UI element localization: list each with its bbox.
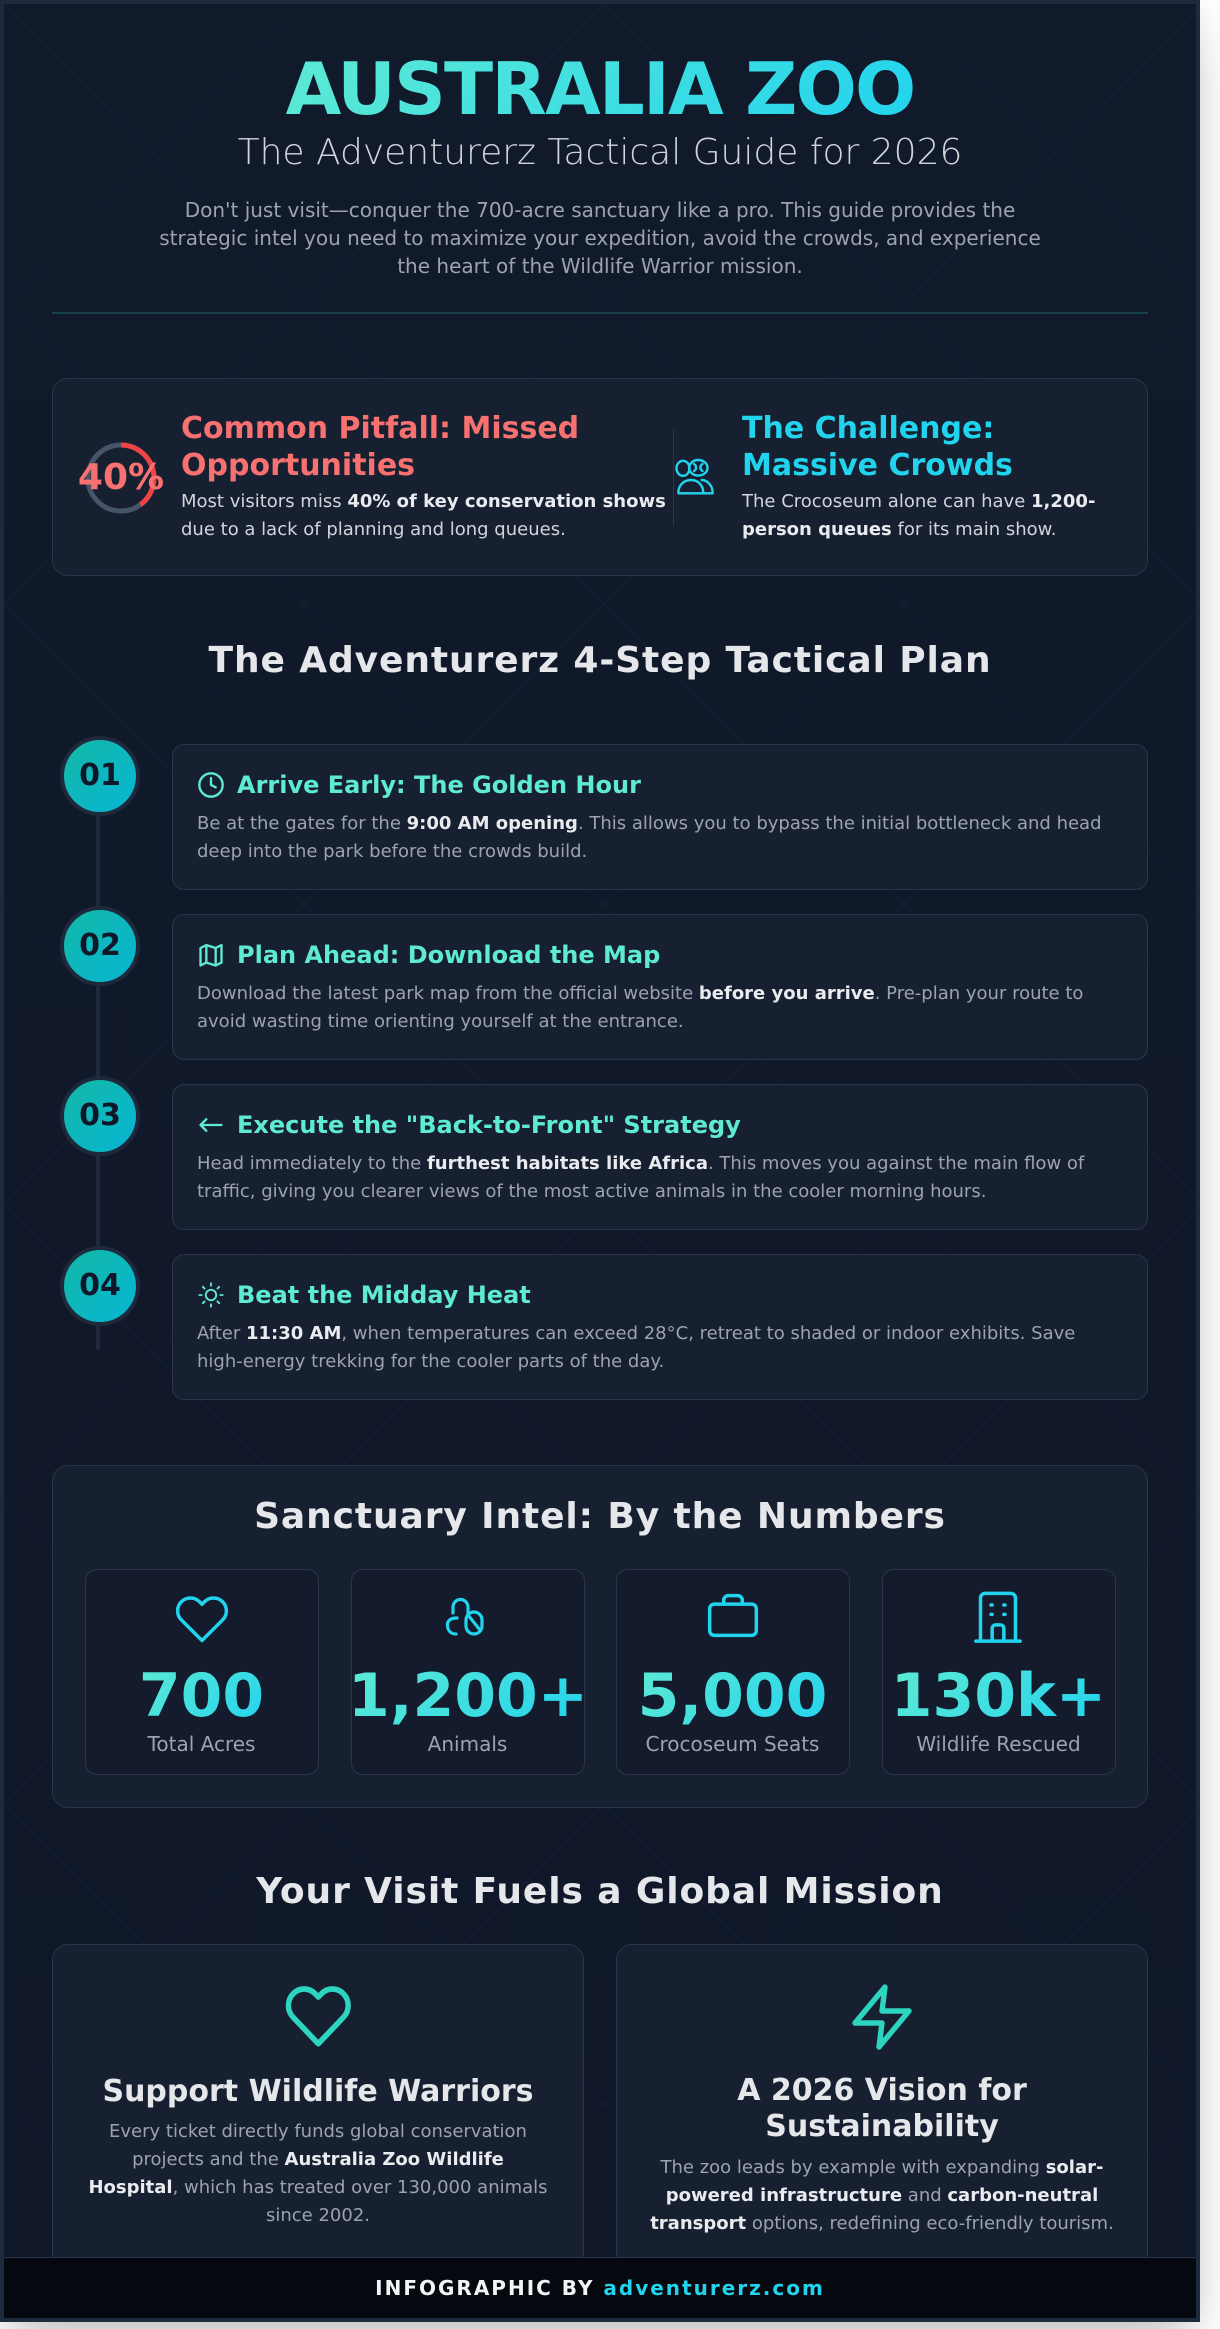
challenge heading: Massive Crowds [742, 448, 1013, 483]
step 2 text: Download the latest park map from the official website before you arrive. Pre-plan your route to [197, 983, 1083, 1004]
step 1 title: Arrive Early: The Golden Hour [237, 771, 641, 799]
icon: briefcase [708, 1594, 758, 1638]
challenge text: The Crocoseum alone can have 1,200- [742, 491, 1095, 512]
icon: 40 percent ring [78, 442, 164, 514]
step 4 title: Beat the Midday Heat [237, 1281, 531, 1309]
icon: animals [446, 1598, 484, 1636]
step 3 text [197, 1153, 1085, 1202]
mission text: warriors: Every ticket directly funds global conservation [109, 2121, 527, 2142]
icon: heart [176, 1596, 228, 1642]
step 3 title: Execute the "Back-to-Front" Strategy [237, 1111, 741, 1139]
pitfall heading: Common Pitfall: Missed [181, 411, 579, 446]
step 3 number [60, 1076, 140, 1156]
step 4 text: high-energy trekking for the cooler parts of the day. [197, 1351, 664, 1372]
mission text: warriors [88, 2121, 548, 2226]
step 1 text: deep into the park before the crowds build. [197, 841, 587, 862]
title: AUSTRALIA ZOO [286, 47, 914, 131]
step 3 card [172, 1084, 1148, 1230]
step 4 number [60, 1246, 140, 1326]
step 1 card [172, 744, 1148, 890]
mission text: sustainability: powered infrastructure and carbon-neutral [666, 2185, 1098, 2206]
heading: 4-step plan: The Adventurerz 4-Step Tactical Plan [208, 640, 992, 681]
panel: sanctuary numbers [52, 1465, 1148, 1808]
step 1 number: 01 [79, 758, 121, 793]
mission text: warriors: Hospital, which has treated over 130,000 animals [88, 2177, 548, 2198]
step 2 number: 02 [79, 928, 121, 963]
stat card: acres [85, 1569, 319, 1775]
pitfall text [181, 491, 666, 540]
mission title: sustainability: Sustainability [765, 2109, 999, 2144]
icon: clock [198, 772, 224, 798]
step 3 number: 03 [79, 1098, 121, 1133]
icon: lightning [852, 1984, 912, 2050]
challenge heading: The Challenge: [742, 411, 994, 446]
stat value: 5,000: 5,000 [638, 1661, 827, 1731]
panel divider [673, 429, 674, 526]
stat label: rescued: Wildlife Rescued [916, 1732, 1081, 1756]
step 2 card [172, 914, 1148, 1060]
mission title: sustainability [737, 2073, 1027, 2144]
step 4 text: After 11:30 AM, when temperatures can exceed 28°C, retreat to shaded or indoor exhibits. Save [197, 1323, 1075, 1344]
step 1 number [60, 736, 140, 816]
step 2 text [197, 983, 1083, 1032]
intro text: Don't just visit—conquer the 700-acre sanctuary like a pro. This guide provides the [185, 198, 1015, 222]
stat value: 130k+: 130k+ [891, 1661, 1106, 1731]
pitfall text: Most visitors miss 40% of key conservation shows [181, 491, 666, 512]
icon: sun [198, 1282, 224, 1308]
stat label: animals: Animals [428, 1732, 507, 1756]
heading: global mission: Your Visit Fuels a Global Mission [256, 1871, 944, 1912]
footer [4, 2257, 1196, 2318]
stat card: rescued [882, 1569, 1116, 1775]
icon: 40 percent ring: 40% [78, 457, 164, 498]
step 2 number [60, 906, 140, 986]
mission text: warriors: projects and the Australia Zoo Wildlife [132, 2149, 504, 2170]
step 4 text [197, 1323, 1075, 1372]
step 2 text: avoid wasting time orienting yourself at the entrance. [197, 1011, 684, 1032]
mission text: sustainability: transport options, redefining eco-friendly tourism. [650, 2213, 1114, 2234]
intro text [159, 198, 1041, 278]
pitfall heading [181, 411, 579, 483]
heading: numbers: Sanctuary Intel: By the Numbers [254, 1496, 946, 1537]
footer: INFOGRAPHIC BY adventurerz.com [375, 2276, 825, 2300]
challenge text: person queues for its main show. [742, 519, 1056, 540]
step 1 text [197, 813, 1102, 862]
mission title: sustainability: A 2026 Vision for [737, 2073, 1027, 2108]
step 3 text: traffic, giving you clearer views of the most active animals in the cooler morning hours. [197, 1181, 986, 1202]
panel: wildlife warriors [52, 1944, 584, 2304]
stat value: 1,200+: 1,200+ [348, 1661, 588, 1731]
panel: sustainability [616, 1944, 1148, 2304]
step 4 card [172, 1254, 1148, 1400]
challenge text [742, 491, 1095, 540]
panel: pitfall and challenge [52, 378, 1148, 576]
step 2 title: Plan Ahead: Download the Map [237, 941, 660, 969]
subtitle: The Adventurerz Tactical Guide for 2026 [238, 132, 962, 173]
mission text: sustainability: The zoo leads by example with expanding solar- [661, 2157, 1103, 2178]
icon: mission heart [286, 1986, 351, 2046]
step 4 number: 04 [79, 1268, 121, 1303]
pitfall text: due to a lack of planning and long queues. [181, 519, 566, 540]
mission text: warriors: since 2002. [266, 2205, 370, 2226]
stat card: animals [351, 1569, 585, 1775]
stat label: seats: Crocoseum Seats [646, 1732, 819, 1756]
challenge heading [742, 411, 1013, 483]
icon: arrow left [199, 1118, 223, 1132]
icon: building [974, 1592, 1022, 1643]
intro text: the heart of the Wildlife Warrior mission. [397, 254, 803, 278]
step 1 text: Be at the gates for the 9:00 AM opening. This allows you to bypass the initial bottleneck and head [197, 813, 1102, 834]
stat label: acres: Total Acres [148, 1732, 255, 1756]
intro text: strategic intel you need to maximize your expedition, avoid the crowds, and experience [159, 226, 1041, 250]
icon: map [199, 944, 223, 967]
header divider [52, 312, 1148, 314]
mission text: sustainability [650, 2157, 1114, 2234]
mission title: warriors: Support Wildlife Warriors [102, 2074, 534, 2109]
timeline line [96, 780, 100, 1350]
stat value: 700: 700 [139, 1661, 264, 1731]
icon: crowd [675, 458, 714, 494]
stat card: seats [616, 1569, 850, 1775]
step 3 text: Head immediately to the furthest habitats like Africa. This moves you against the main flow of [197, 1153, 1084, 1174]
pitfall heading: Opportunities [181, 448, 415, 483]
